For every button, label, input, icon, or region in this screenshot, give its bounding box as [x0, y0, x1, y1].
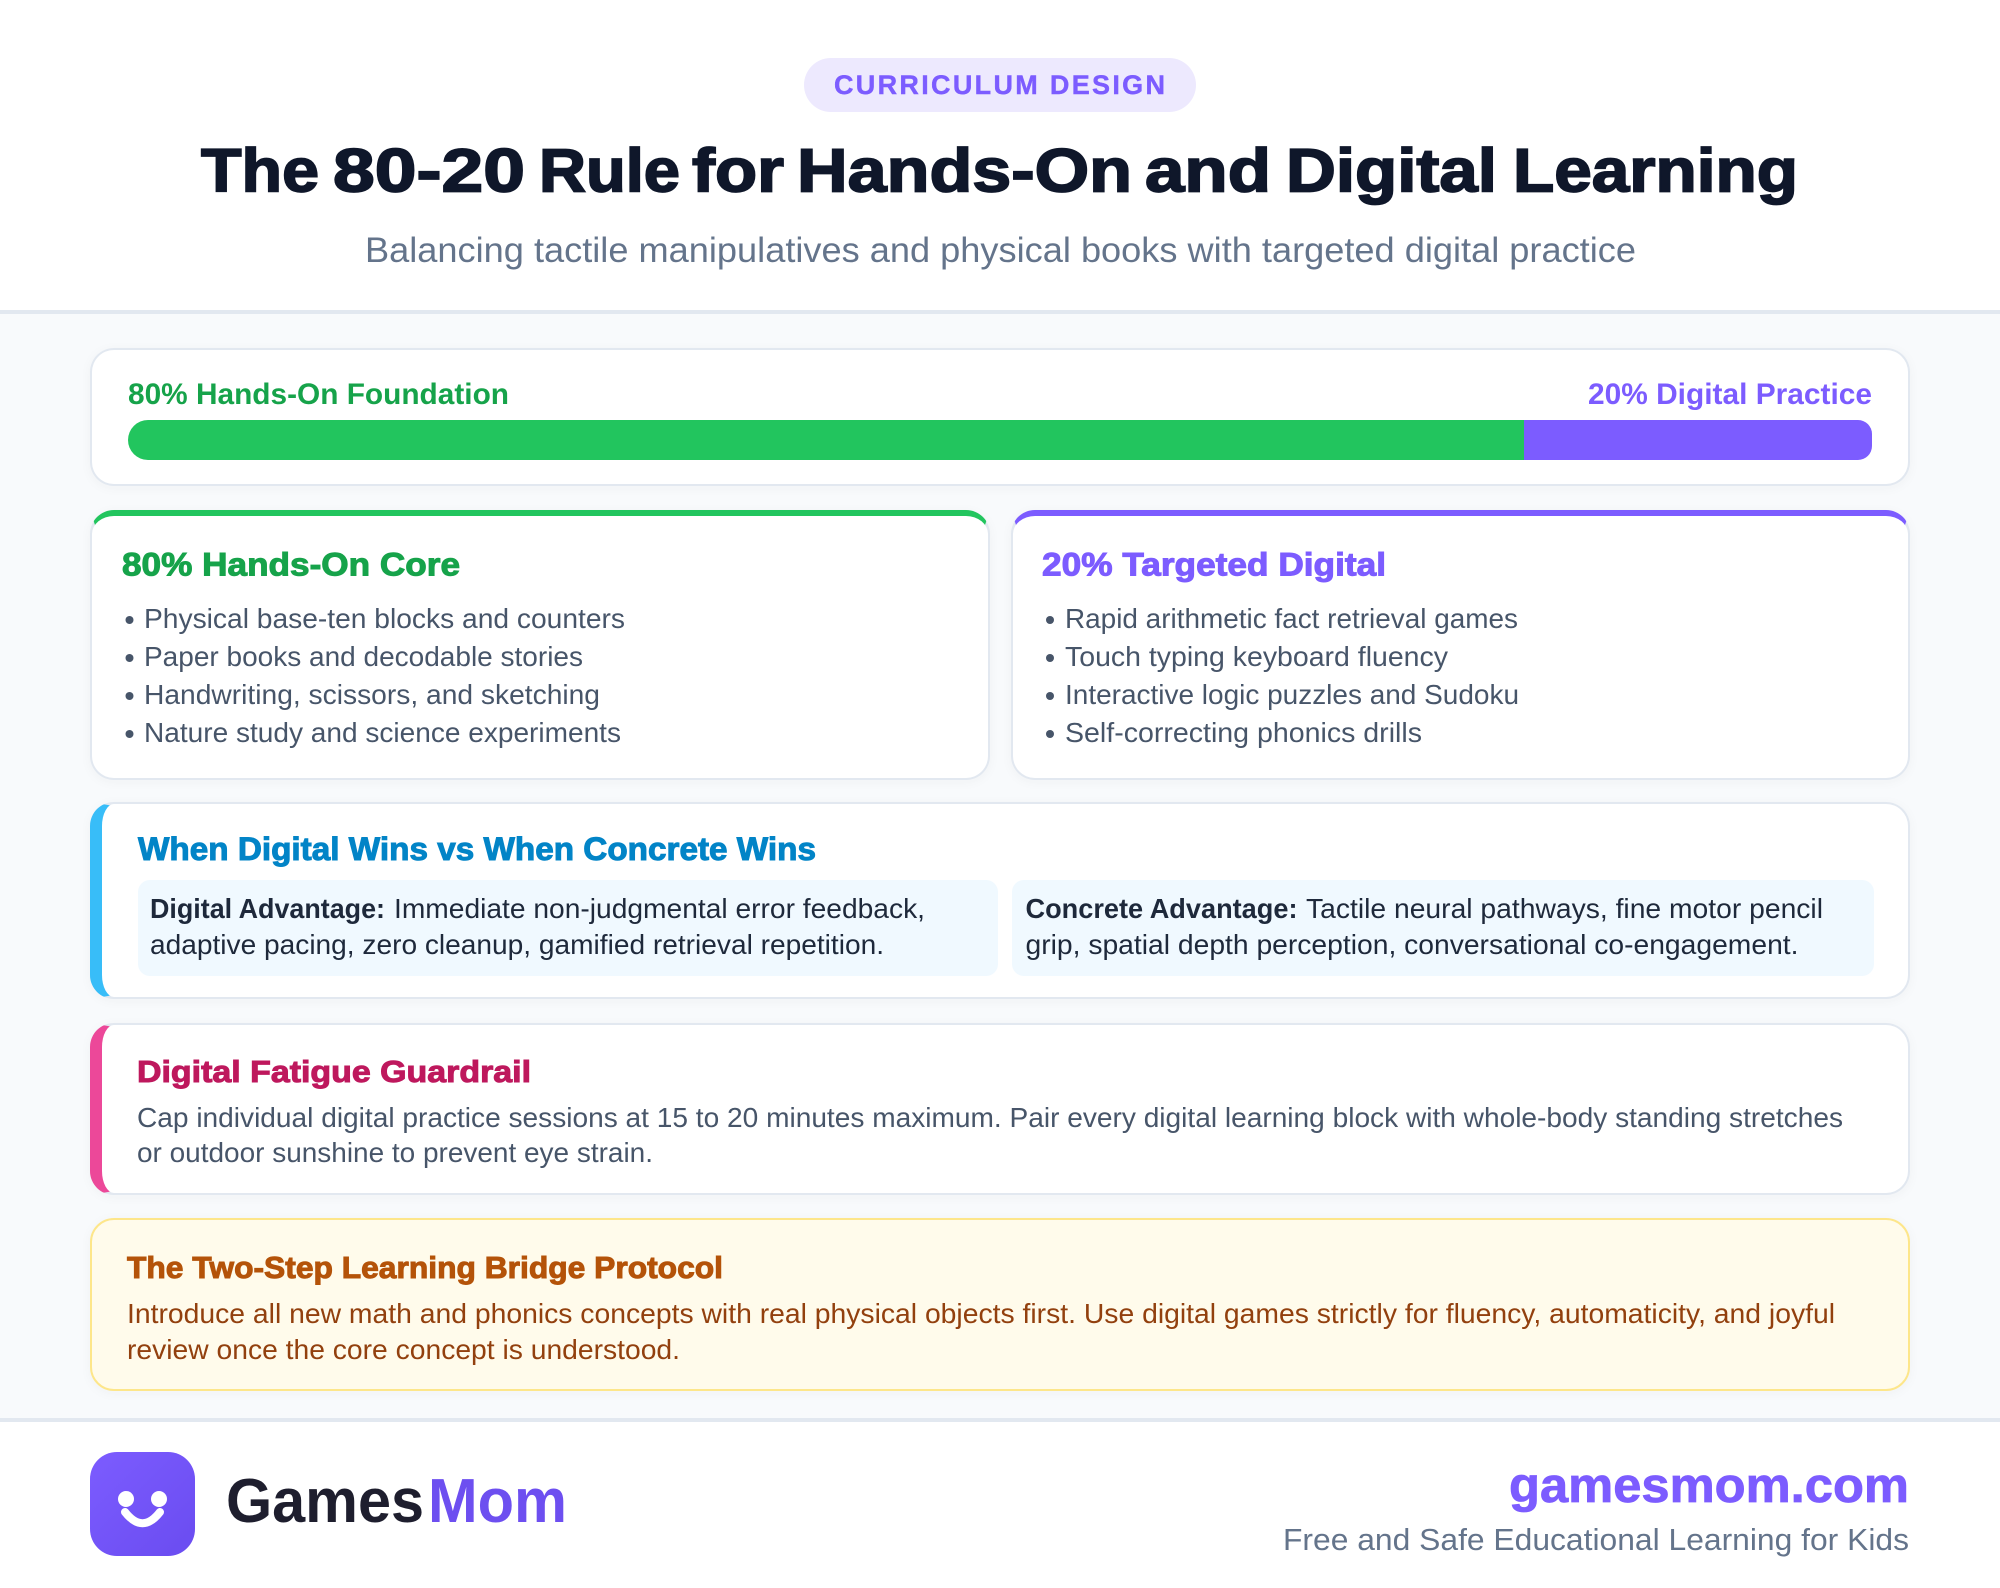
title: Rule	[539, 136, 680, 204]
label: 80% hands-on foundation: 80% Hands-On Foundation	[128, 378, 509, 411]
body text	[137, 1102, 1843, 1168]
box: digital advantage: adaptive pacing, zero cleanup, gamified retrieval repetition.	[150, 929, 884, 960]
list: digital items: Interactive logic puzzles and Sudoku	[1065, 679, 1519, 710]
panel: 80% hands-on core	[90, 510, 990, 780]
wordmark: gamesmom: Games	[226, 1467, 424, 1536]
title: 80-20	[333, 136, 525, 204]
title: for	[692, 136, 784, 204]
icon: gamesmom smiling logo	[90, 1452, 195, 1556]
box: concrete advantage: Tactile neural pathways, fine motor pencil	[1306, 893, 1823, 924]
list: digital items: Touch typing keyboard fluency	[1065, 641, 1448, 672]
wordmark: gamesmom: Mom	[428, 1467, 567, 1536]
box: digital advantage: Immediate non-judgmental error feedback,	[394, 893, 925, 924]
site url: gamesmom.com	[1509, 1459, 1909, 1513]
list: hands-on items: Nature study and science experiments	[144, 717, 621, 748]
subtitle: Balancing tactile manipulatives and physical books with targeted digital practice	[365, 231, 1636, 270]
panel: two-step learning bridge protocol	[91, 1219, 1909, 1390]
title: Digital	[1286, 136, 1497, 204]
box: digital advantage	[138, 880, 998, 976]
body text: Introduce all new math and phonics concepts with real physical objects first. Use digital games strictly for fluency, automaticity, and joyful	[127, 1298, 1835, 1329]
body text: review once the core concept is understood.	[127, 1334, 680, 1365]
tagline: Free and Safe Educational Learning for Kids	[1283, 1523, 1909, 1557]
panel: split bar	[90, 348, 1910, 486]
panel: 20% targeted digital	[1011, 510, 1910, 780]
heading: 20% Targeted Digital	[1042, 546, 1386, 582]
box: concrete advantage	[1012, 880, 1874, 976]
title	[201, 136, 1798, 204]
body text: or outdoor sunshine to prevent eye strain.	[137, 1137, 653, 1168]
title: Hands-On	[797, 136, 1132, 204]
title: and	[1145, 136, 1271, 204]
page background	[0, 310, 2000, 1422]
header	[0, 0, 2000, 314]
panel: when digital wins vs when concrete wins	[90, 802, 1910, 999]
body text: Cap individual digital practice sessions at 15 to 20 minutes maximum. Pair every digital learning block with whole-body standing stretches	[137, 1102, 1843, 1133]
list: hands-on items: Physical base-ten blocks and counters	[144, 603, 625, 634]
label: 20% digital practice: 20% Digital Practice	[1588, 378, 1872, 411]
heading: 80% Hands-On Core	[122, 546, 460, 582]
list: hands-on items	[126, 603, 625, 748]
badge: curriculum design: CURRICULUM DESIGN	[834, 70, 1165, 100]
body text	[127, 1298, 1835, 1365]
box: digital advantage: Digital Advantage:	[150, 893, 385, 924]
list: hands-on items: Handwriting, scissors, and sketching	[144, 679, 600, 710]
bar chart: 80/20 split	[128, 420, 1872, 460]
badge: curriculum design	[804, 58, 1196, 112]
heading: When Digital Wins vs When Concrete Wins	[138, 831, 816, 867]
list: digital items: Self-correcting phonics drills	[1065, 717, 1422, 748]
footer	[0, 1418, 2000, 1588]
heading: Digital Fatigue Guardrail	[137, 1054, 531, 1089]
title: The	[201, 136, 319, 204]
list: hands-on items: Paper books and decodable stories	[144, 641, 583, 672]
box: concrete advantage: Concrete Advantage:	[1026, 893, 1298, 924]
panel: digital fatigue guardrail	[90, 1023, 1910, 1195]
title: Learning	[1513, 136, 1798, 204]
heading: The Two-Step Learning Bridge Protocol	[127, 1250, 723, 1285]
list: digital items	[1046, 603, 1519, 748]
box: concrete advantage: grip, spatial depth perception, conversational co-engagement.	[1026, 929, 1798, 960]
wordmark: gamesmom	[226, 1467, 567, 1536]
list: digital items: Rapid arithmetic fact retrieval games	[1065, 603, 1518, 634]
